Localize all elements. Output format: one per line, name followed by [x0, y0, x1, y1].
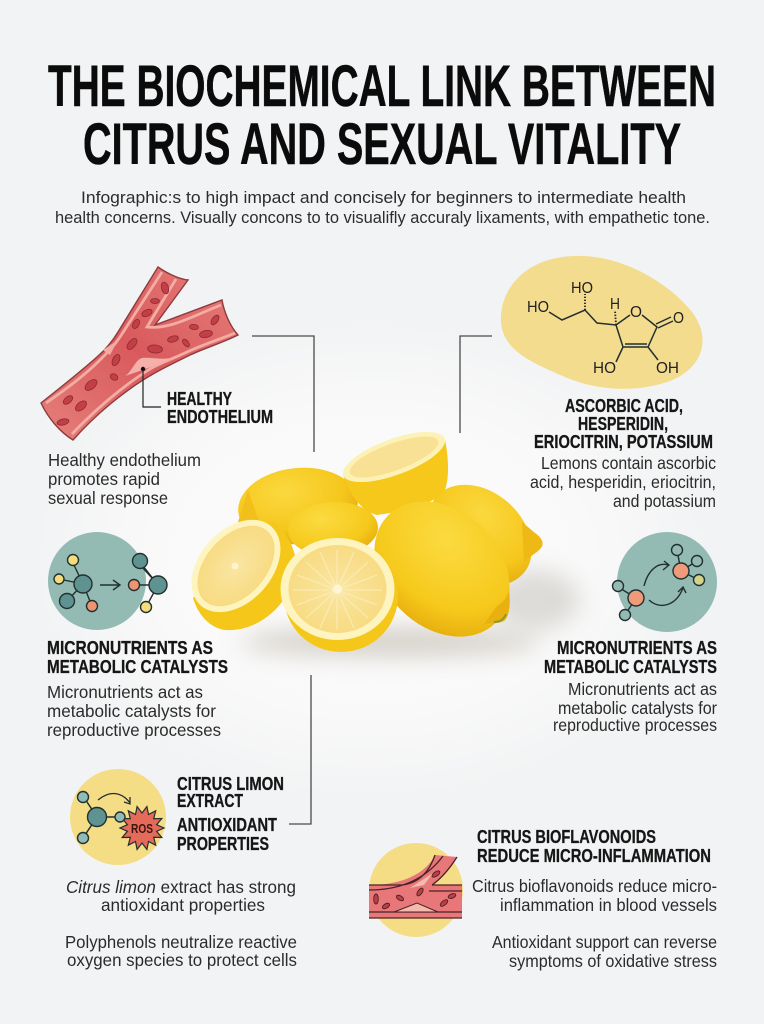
text: endothelium description [48, 450, 201, 508]
central image: lemon pile [174, 422, 580, 664]
text: lemon compounds description [530, 453, 716, 511]
text: citrus limon description: Citrus limon extract has strong [66, 877, 296, 897]
left half lemon [174, 503, 298, 630]
label: healthy endothelium [167, 389, 273, 427]
text: micronutrients right description: Micronutrients act as [568, 679, 717, 699]
subtitle [55, 188, 710, 227]
connector: compounds to lemons [460, 336, 492, 433]
label: healthy endothelium: HEALTHY [167, 389, 232, 409]
text: bioflavonoids description: Citrus bioflavonoids reduce micro- [472, 876, 717, 896]
label: citrus bioflavonoids: REDUCE MICRO-INFLAMMATION [477, 846, 711, 866]
icon: micronutrient catalytic cycle right [612, 532, 717, 632]
text: micronutrients left description [47, 682, 221, 740]
text: citrus limon description [65, 877, 297, 970]
icon: ascorbic acid molecule on yellow blob [501, 256, 703, 389]
label: ascorbic acid compounds: ASCORBIC ACID, [565, 396, 683, 416]
large front lemon [347, 474, 537, 664]
label: ascorbic acid compounds [534, 396, 713, 452]
text: micronutrients right description: metabolic catalysts for [558, 698, 717, 718]
text: citrus limon description: Polyphenols neutralize reactive [65, 932, 297, 952]
icon: ascorbic acid molecule on yellow blob: HO [593, 360, 616, 377]
label: citrus bioflavonoids [477, 827, 711, 866]
icon: ascorbic acid molecule on yellow blob: H [610, 296, 620, 313]
text: micronutrients left description: reproductive processes [47, 720, 221, 740]
top half lemon [337, 422, 451, 515]
back right lemon [408, 464, 552, 606]
icon: ascorbic acid molecule on yellow blob: O [673, 310, 684, 327]
text: bioflavonoids description: Antioxidant support can reverse [492, 932, 717, 952]
label: citrus limon antioxidant: EXTRACT [177, 791, 243, 811]
label: micronutrients left: METABOLIC CATALYSTS [47, 657, 228, 677]
back left lemon [234, 462, 362, 550]
text: endothelium description: Healthy endothelium [48, 450, 201, 470]
illustration: branching blood vessel [41, 267, 238, 440]
label: citrus limon antioxidant: CITRUS LIMON [177, 774, 284, 794]
label: citrus limon antioxidant: PROPERTIES [177, 834, 269, 854]
title [48, 54, 716, 177]
text: bioflavonoids description: inflammation in blood vessels [500, 895, 717, 915]
label: citrus limon antioxidant [177, 774, 284, 854]
text: micronutrients left description: metabolic catalysts for [47, 701, 216, 721]
icon: ascorbic acid molecule on yellow blob: OH [656, 360, 679, 377]
label: ascorbic acid compounds: HESPERIDIN, [578, 414, 668, 434]
connector: antioxidant to lemons [289, 675, 311, 824]
icon: micronutrient molecule left [48, 532, 167, 630]
label: ascorbic acid compounds: ERIOCITRIN, POTASSIUM [534, 432, 713, 452]
label: micronutrients right: METABOLIC CATALYSTS [544, 657, 717, 677]
icon: ascorbic acid molecule on yellow blob: HO [571, 280, 593, 297]
icon: ascorbic acid molecule on yellow blob: O [630, 304, 642, 321]
text: citrus limon description: antioxidant properties [101, 895, 265, 915]
icon: ascorbic acid molecule on yellow blob: HO [527, 299, 549, 316]
label: healthy endothelium: ENDOTHELIUM [167, 407, 273, 427]
front half lemon [280, 538, 398, 652]
endothelium patch [125, 358, 172, 376]
icon: antioxidant neutralising ROS: ROS [131, 822, 153, 836]
text: endothelium description: promotes rapid [48, 469, 160, 489]
text: lemon compounds description: acid, hesperidin, eriocitrin, [530, 472, 716, 492]
label: micronutrients left: MICRONUTRIENTS AS [47, 638, 213, 658]
text: endothelium description: sexual response [48, 488, 168, 508]
label: micronutrients left [47, 638, 228, 677]
subtitle: health concerns. Visually concons to to visualifly accuraly lixaments, with empathetic tone. [55, 208, 710, 227]
text: bioflavonoids description: symptoms of oxidative stress [509, 951, 717, 971]
label: citrus bioflavonoids: CITRUS BIOFLAVONOIDS [477, 827, 656, 847]
text: micronutrients left description: Micronutrients act as [47, 682, 203, 702]
text: bioflavonoids description [472, 876, 717, 971]
icon: vessel with reduced inflammation [369, 843, 463, 937]
lemon shadow [240, 628, 540, 656]
subtitle: Infographic:s to high impact and concisely for beginners to intermediate health [81, 188, 686, 207]
text: micronutrients right description: reproductive processes [553, 715, 717, 735]
icon: antioxidant neutralising ROS [70, 769, 166, 865]
connector: endothelium to lemons [252, 336, 314, 452]
small middle lemon [287, 500, 379, 558]
text: lemon compounds description: Lemons contain ascorbic [541, 453, 716, 473]
text: citrus limon description: oxygen species to protect cells [67, 950, 297, 970]
text: lemon compounds description: and potassium [613, 491, 716, 511]
label: citrus limon antioxidant: ANTIOXIDANT [177, 815, 277, 835]
text: micronutrients right description [553, 679, 717, 735]
label: micronutrients right: MICRONUTRIENTS AS [557, 638, 717, 658]
label: micronutrients right [544, 638, 717, 677]
